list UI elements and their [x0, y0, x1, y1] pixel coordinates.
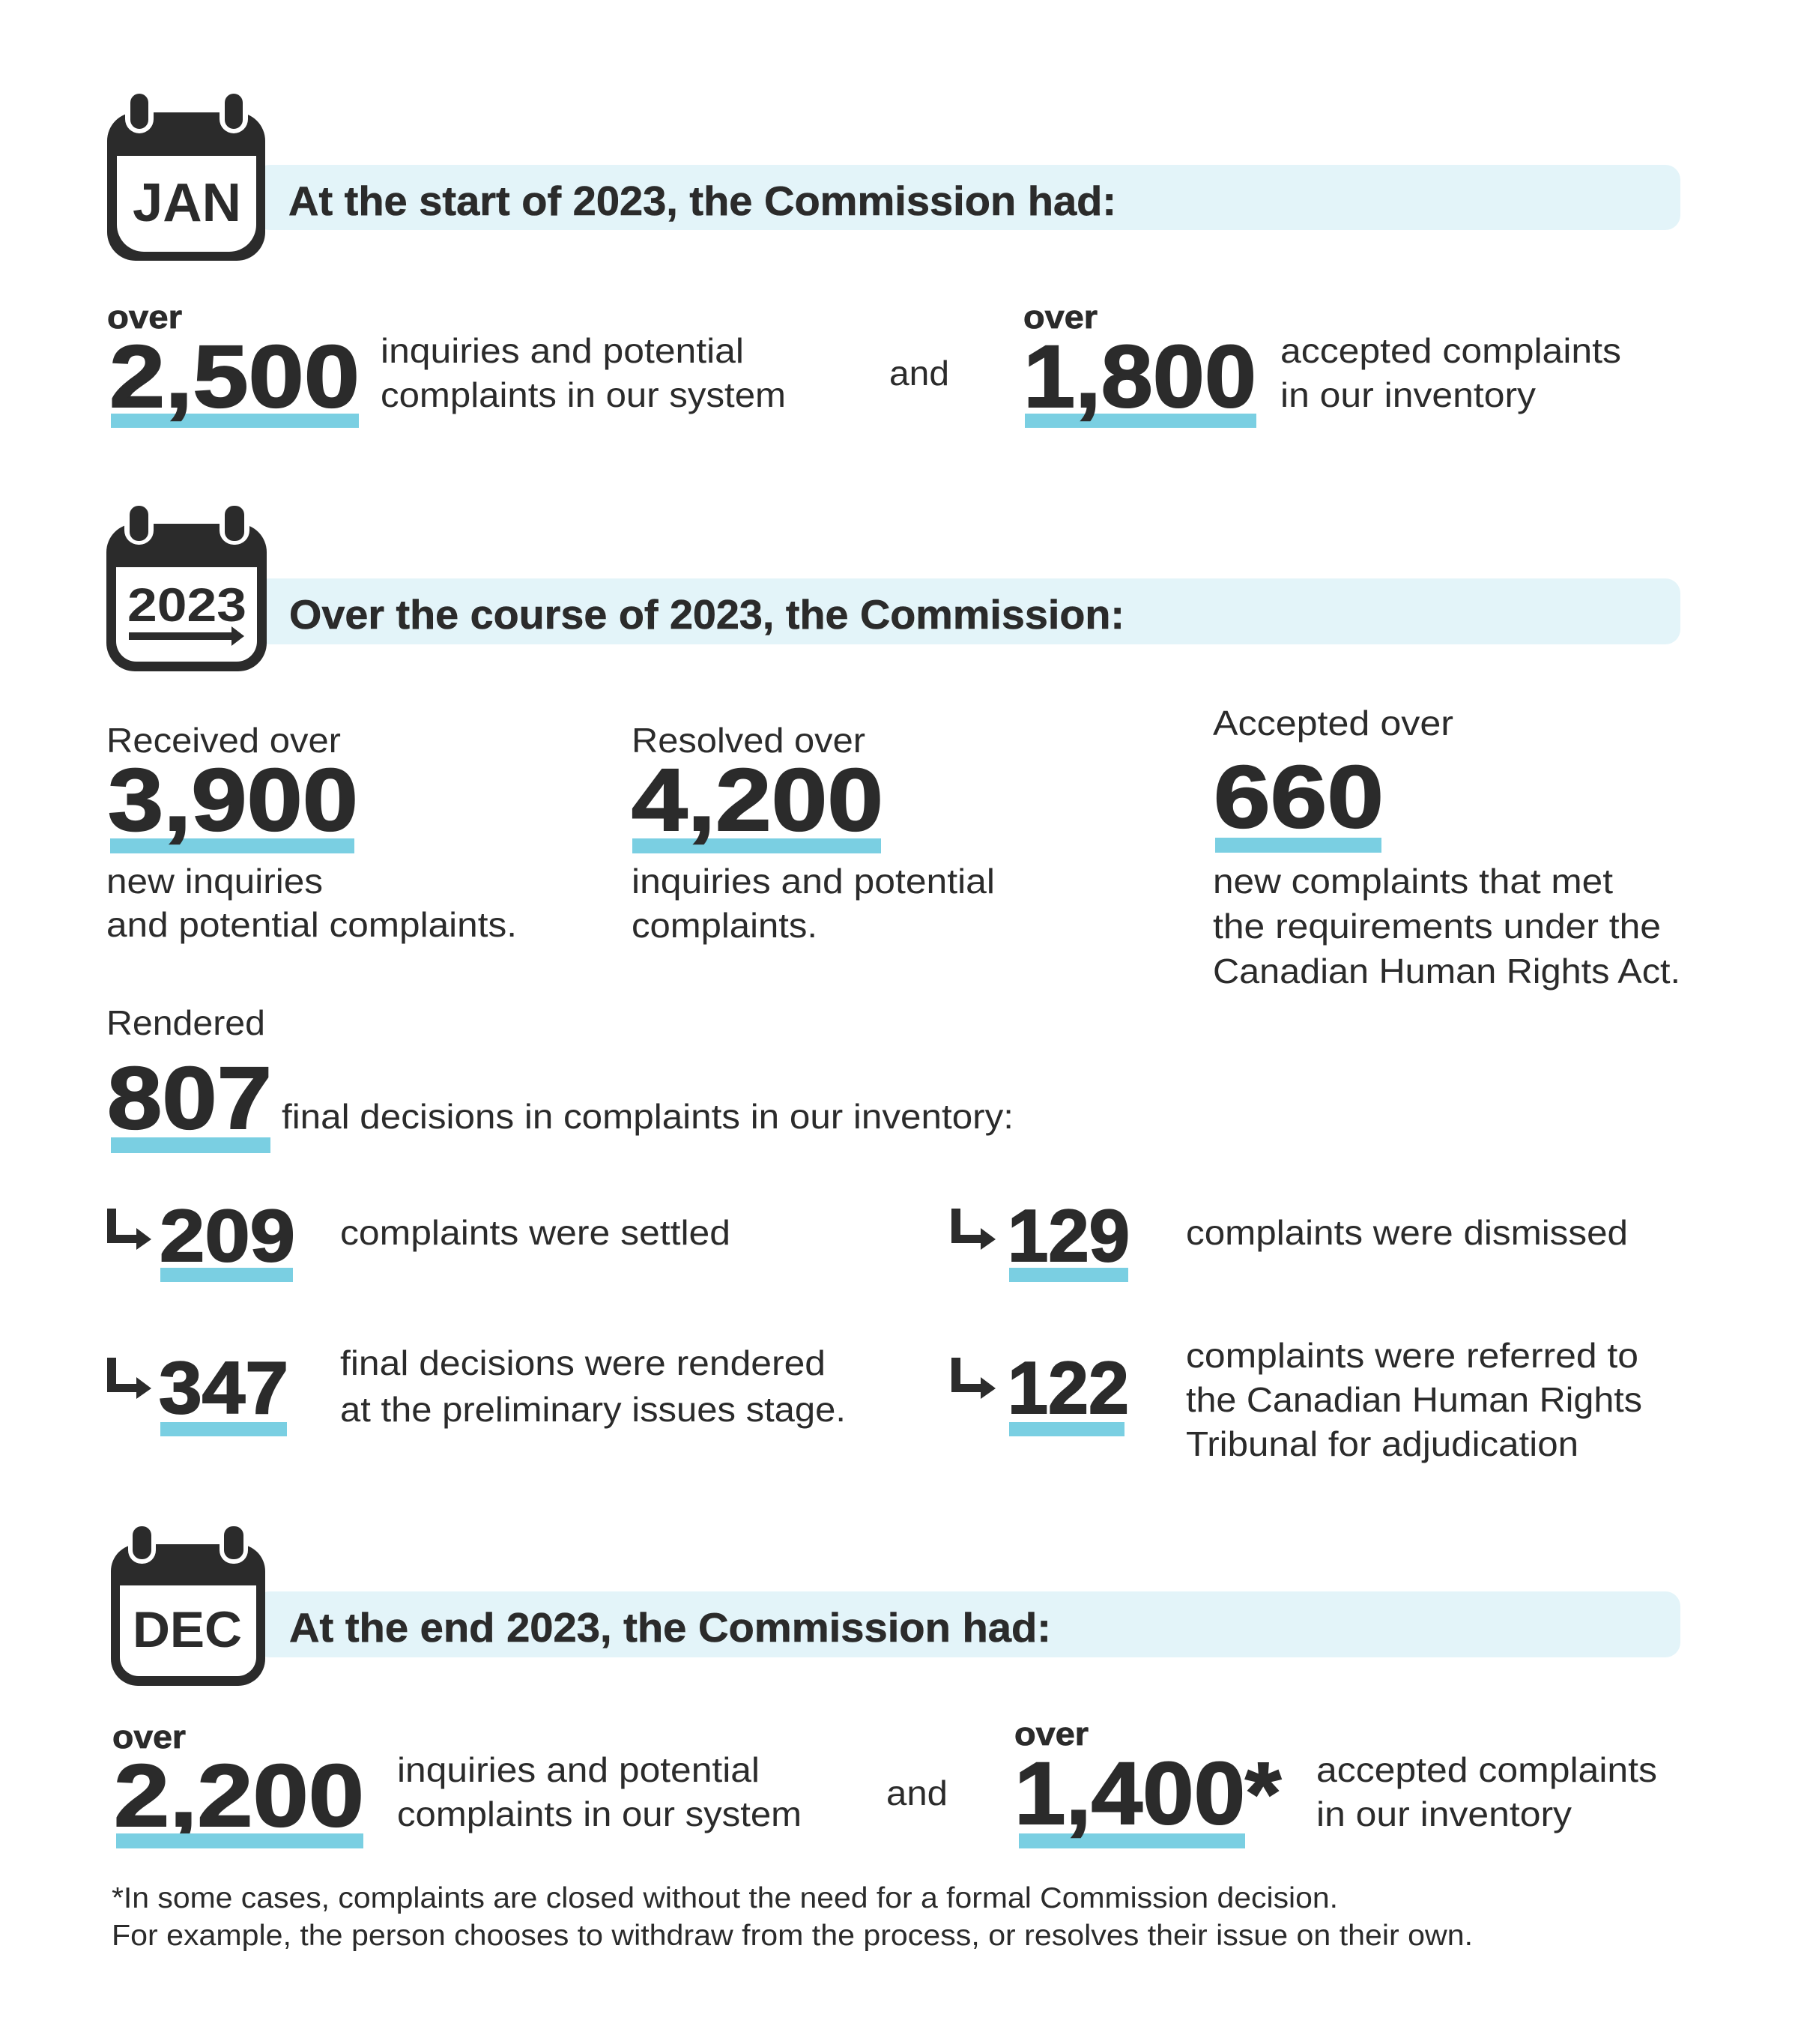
stat: 209 settled: complaints were settled [340, 1213, 730, 1252]
stat: received over 3,900: 3,900 [108, 751, 358, 850]
heading band: start of 2023: At the start of 2023, the Commission had: [288, 178, 1116, 224]
stat: 129 dismissed: 129 [1008, 1194, 1130, 1277]
stat: rendered 807 final decisions: Rendered [106, 1003, 265, 1042]
footnote [112, 1882, 1473, 1952]
arrow: referred to tribunal [951, 1358, 996, 1399]
stat: received over 3,900: new inquiries [106, 862, 323, 901]
connector word: and: and [889, 354, 949, 393]
stat: over 2,200 inquiries and potential complaints [112, 1719, 802, 1848]
icon: January calendar: JAN [133, 173, 241, 233]
stat: over 1,400* accepted complaints [1014, 1716, 1657, 1848]
stat: rendered 807 final decisions [106, 1003, 1014, 1153]
heading band: end of 2023: At the end 2023, the Commission had: [289, 1604, 1051, 1651]
stat: over 2,500 inquiries and potential complaints [107, 299, 786, 428]
stat: 129 dismissed [1008, 1194, 1628, 1282]
arrow: dismissed [951, 1209, 996, 1250]
stat: resolved over 4,200: 4,200 [632, 751, 883, 850]
stat: over 2,500 inquiries and potential complaints: 2,500 [109, 327, 360, 426]
stat: over 2,200 inquiries and potential complaints: inquiries and potential [397, 1750, 760, 1789]
stat: over 2,500 inquiries and potential complaints: complaints in our system [381, 375, 786, 414]
arrow: settled [107, 1209, 151, 1250]
heading band: end of 2023 [255, 1591, 1680, 1657]
stat: over 2,500 inquiries and potential complaints: inquiries and potential [381, 331, 744, 370]
stat: accepted over 660: new complaints that met [1213, 862, 1613, 901]
stat: received over 3,900: Received over [106, 721, 341, 760]
stat: 122 referred to tribunal: Tribunal for adjudication [1186, 1424, 1578, 1463]
stat: 129 dismissed: complaints were dismissed [1186, 1213, 1628, 1252]
stat: accepted over 660: the requirements under the [1213, 907, 1661, 946]
stat: received over 3,900: and potential complaints. [106, 905, 517, 944]
icon: December calendar [111, 1526, 265, 1686]
heading band: over the course of 2023 [255, 578, 1680, 644]
stat: resolved over 4,200: inquiries and potential [632, 862, 995, 901]
stat: over 2,200 inquiries and potential complaints: complaints in our system [397, 1794, 802, 1833]
stat: rendered 807 final decisions: 807 [107, 1049, 272, 1148]
icon: 2023 calendar [106, 506, 267, 671]
stat: over 1,400* accepted complaints: accepted complaints [1316, 1750, 1657, 1789]
stat: resolved over 4,200: complaints. [632, 906, 817, 945]
stat: 122 referred to tribunal: the Canadian Human Rights [1186, 1380, 1642, 1419]
stat: resolved over 4,200 [632, 721, 995, 945]
stat: over 1,400* accepted complaints: in our inventory [1316, 1794, 1572, 1833]
footnote: *In some cases, complaints are closed without the need for a formal Commission decision. [112, 1882, 1338, 1914]
stat: over 1,400* accepted complaints: over [1014, 1716, 1089, 1753]
footnote: For example, the person chooses to withdraw from the process, or resolves their issue on their own. [112, 1920, 1473, 1952]
stat: over 1,800 accepted complaints: accepted complaints [1280, 331, 1621, 370]
stat: accepted over 660: 660 [1214, 748, 1384, 847]
stat: over 2,200 inquiries and potential complaints: over [112, 1719, 186, 1756]
connector word: and: and [886, 1774, 948, 1812]
stat: resolved over 4,200: Resolved over [632, 721, 865, 760]
stat: over 1,400* accepted complaints: 1,400* [1014, 1744, 1281, 1843]
stat: over 1,800 accepted complaints: over [1023, 299, 1098, 336]
stat: 347 preliminary issues stage: final decisions were rendered [340, 1343, 826, 1382]
stat: 122 referred to tribunal: 122 [1008, 1346, 1129, 1429]
heading band: over the course of 2023: Over the course of 2023, the Commission: [289, 591, 1124, 638]
stat: 122 referred to tribunal: complaints were referred to [1186, 1336, 1638, 1375]
stat: over 1,800 accepted complaints: in our inventory [1280, 375, 1536, 414]
stat: 347 preliminary issues stage: at the preliminary issues stage. [340, 1390, 846, 1429]
stat: accepted over 660 [1213, 704, 1680, 991]
icon: December calendar: DEC [133, 1601, 242, 1658]
heading band: start of 2023 [255, 165, 1680, 230]
stat: over 1,800 accepted complaints [1023, 299, 1621, 428]
stat: 209 settled [160, 1194, 730, 1282]
icon: 2023 calendar: 2023 [127, 579, 246, 632]
icon: January calendar [107, 94, 265, 261]
stat: accepted over 660: Accepted over [1213, 704, 1453, 743]
stat: 122 referred to tribunal [1008, 1336, 1642, 1463]
arrow: preliminary issues [107, 1358, 151, 1399]
stat: 347 preliminary issues stage: 347 [159, 1346, 288, 1429]
stat: over 1,800 accepted complaints: 1,800 [1023, 327, 1256, 426]
stat: received over 3,900 [106, 721, 517, 944]
stat: 347 preliminary issues stage [159, 1343, 846, 1436]
stat: accepted over 660: Canadian Human Rights Act. [1213, 952, 1680, 991]
stat: rendered 807 final decisions: final decisions in complaints in our inventory: [282, 1097, 1014, 1136]
stat: over 2,500 inquiries and potential complaints: over [107, 299, 182, 336]
stat: over 2,200 inquiries and potential complaints: 2,200 [114, 1747, 364, 1845]
stat: 209 settled: 209 [160, 1194, 295, 1277]
